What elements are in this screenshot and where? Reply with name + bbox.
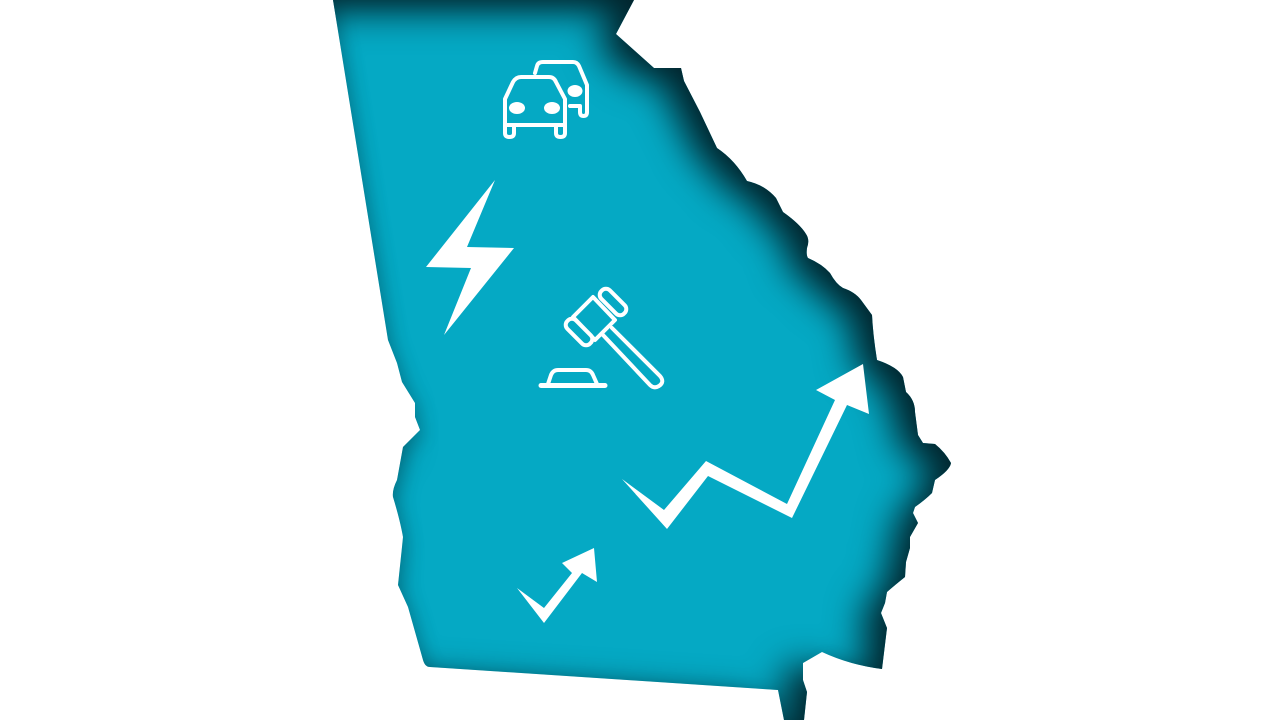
arrow: large rising trend line	[622, 364, 869, 529]
arrow: small rising trend line	[517, 548, 597, 623]
icon: two cars in traffic	[505, 62, 587, 137]
icon: gavel	[541, 286, 662, 387]
icon: lightning bolt	[426, 180, 514, 335]
map: Georgia state cutout	[333, 0, 951, 720]
